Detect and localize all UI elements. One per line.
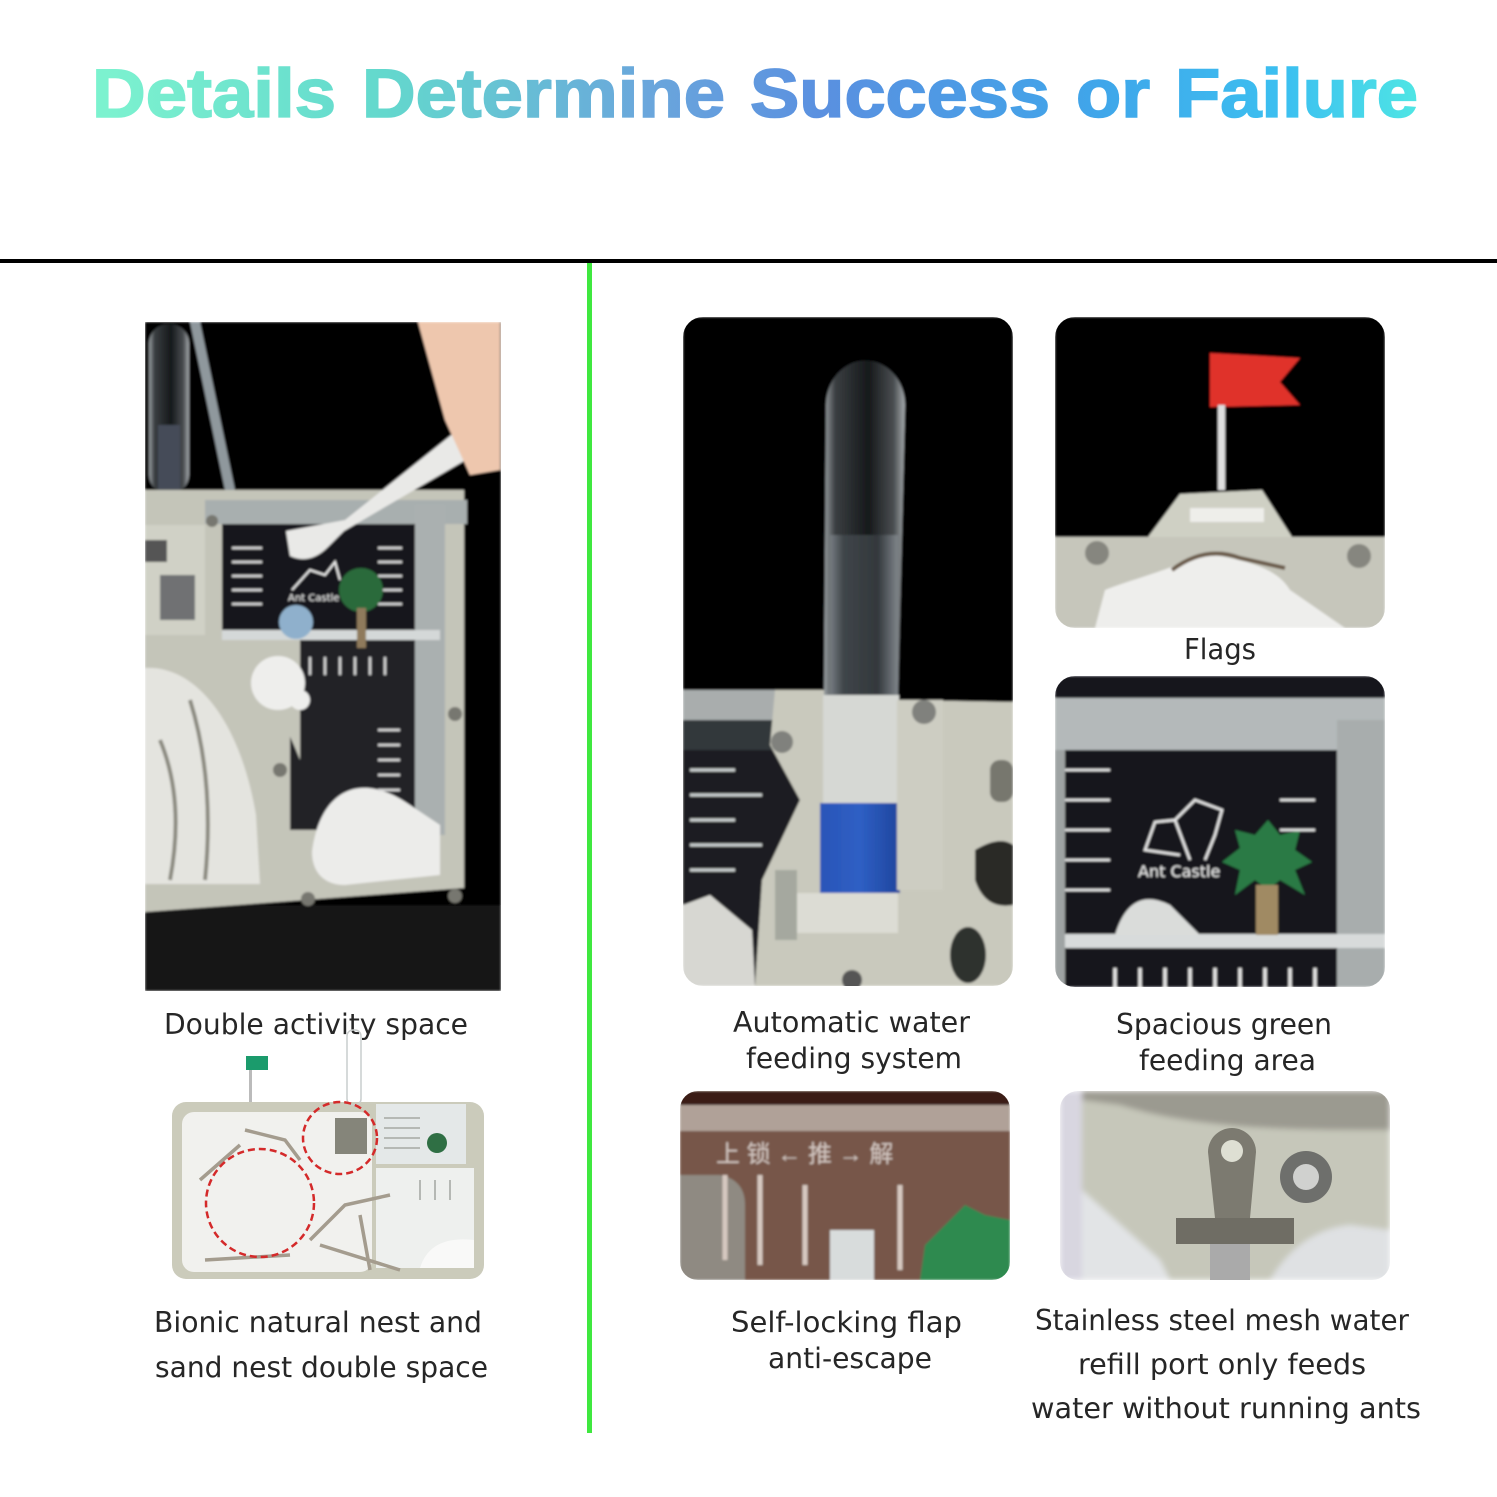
title: Details: [92, 55, 336, 132]
horizontal divider: [0, 259, 1497, 263]
title: Success: [750, 55, 1050, 132]
caption: stainless steel: refill port only feeds: [1078, 1348, 1366, 1381]
caption: flags: Flags: [1184, 633, 1256, 666]
caption: self-locking: Self-locking flap: [731, 1306, 962, 1339]
caption: self-locking: [731, 1306, 962, 1375]
title: [92, 55, 1418, 132]
caption: double activity space: Double activity space: [164, 1008, 468, 1041]
caption: spacious green: [1116, 1008, 1332, 1077]
caption: bionic nest: sand nest double space: [155, 1351, 488, 1384]
panel: green feeding area photo: [1055, 676, 1385, 987]
panel: bionic nest illustration: [172, 1030, 484, 1279]
panel: automatic water feeding photo: [683, 317, 1013, 990]
title: Determine: [362, 55, 725, 132]
panel: flags photo: [1055, 317, 1385, 628]
caption: bionic nest: Bionic natural nest and: [154, 1306, 482, 1339]
vertical green divider: [587, 263, 592, 1433]
caption: spacious green: Spacious green: [1116, 1008, 1332, 1041]
caption: stainless steel: [1031, 1304, 1421, 1425]
caption: bionic nest: [154, 1306, 488, 1384]
panel: stainless steel mesh photo: [1060, 1091, 1390, 1280]
panel: self-locking flap photo: 上 锁 ← 推 → 解: [716, 1141, 893, 1168]
caption: automatic water: Automatic water: [733, 1006, 970, 1039]
panel: double activity space photo: Ant Castle: [288, 593, 339, 604]
caption: stainless steel: Stainless steel mesh water: [1035, 1304, 1409, 1337]
caption: automatic water: [733, 1006, 970, 1075]
title: Failure: [1175, 55, 1418, 132]
caption: self-locking: anti-escape: [768, 1342, 932, 1375]
title: or: [1076, 55, 1150, 132]
panel: green feeding area photo: Ant Castle: [1138, 862, 1220, 881]
panel: self-locking flap photo: [680, 1091, 1010, 1280]
callout: red dashed circles: [206, 1102, 377, 1257]
caption: spacious green: feeding area: [1139, 1044, 1316, 1077]
panel: double activity space photo: [145, 322, 501, 991]
caption: stainless steel: water without running ants: [1031, 1392, 1421, 1425]
caption: automatic water: feeding system: [746, 1042, 962, 1075]
